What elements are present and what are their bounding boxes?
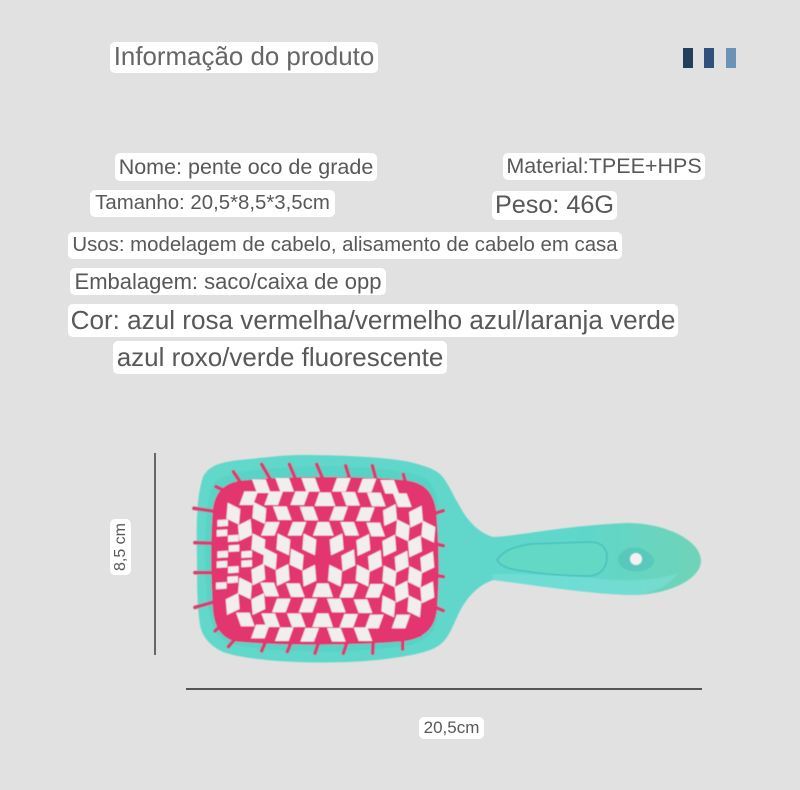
width dimension line (186, 688, 702, 690)
colour line one: Cor: azul rosa vermelha/vermelho azul/laranja verde (71, 305, 675, 335)
brush body and handle (197, 455, 701, 663)
height dimension line (154, 453, 156, 655)
colour line two: azul roxo/verde fluorescente (117, 342, 443, 372)
handle lighter edge (492, 573, 678, 595)
pink grid with pins (194, 464, 443, 653)
width label: 20,5cm (424, 718, 479, 737)
title: Informação do produto (114, 43, 374, 71)
white lattice openings (216, 478, 435, 642)
material: Material:TPEE+HPS (506, 154, 702, 178)
handle grip recess (497, 542, 607, 576)
inner rim highlight (205, 466, 438, 652)
height label: 8,5 cm (112, 523, 128, 571)
icon: three blue bars (683, 48, 736, 68)
product name: Nome: pente oco de grade (119, 155, 373, 179)
packaging: Embalagem: saco/caixa de opp (75, 269, 381, 294)
handle hole (618, 547, 654, 572)
size: Tamanho: 20,5*8,5*3,5cm (95, 192, 330, 214)
height label (110, 519, 131, 575)
uses: Usos: modelagem de cabelo, alisamento de cabelo em casa (72, 234, 618, 256)
weight: Peso: 46G (495, 191, 614, 219)
